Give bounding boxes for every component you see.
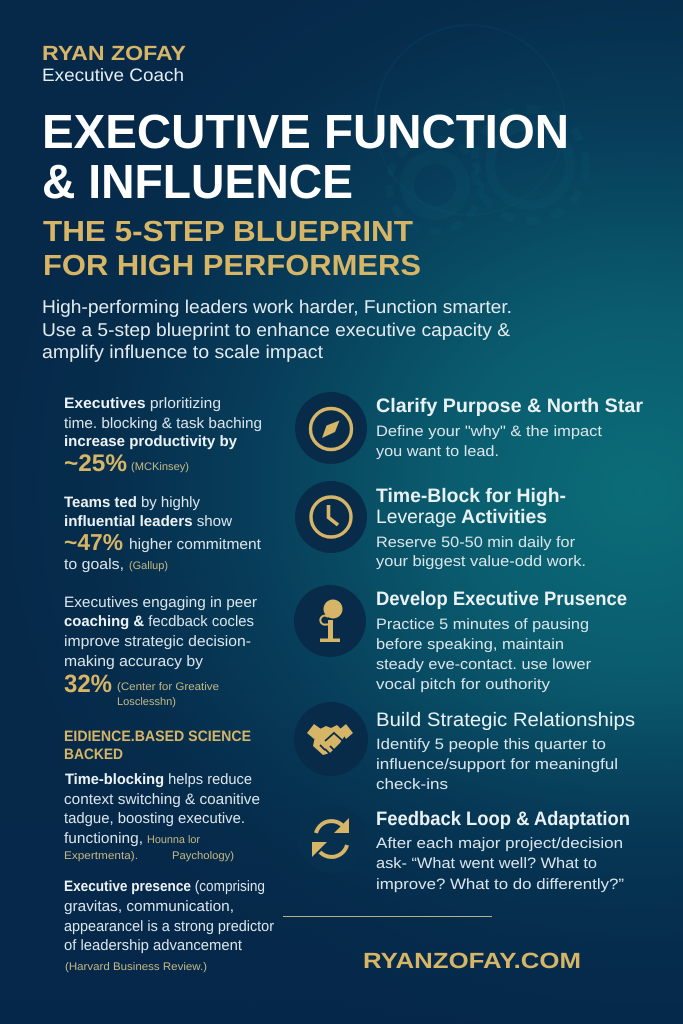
step 4 text: check-ins: [376, 776, 448, 793]
step 3 text: vocal pitch for outhority: [376, 676, 551, 693]
step 1 text: Clarify Purpose & North Star: [376, 395, 643, 417]
website footer: RYANZOFAY.COM: [363, 948, 581, 973]
subtitle: [43, 216, 421, 282]
step 2 text: Time-Block for High-: [376, 485, 566, 507]
stat: commitment: influential leaders show: [64, 513, 232, 530]
stat: decision accuracy: 32%: [64, 670, 112, 698]
step 5 text: [376, 808, 630, 893]
stat: decision accuracy: Losclesshn): [117, 696, 176, 708]
stat: commitment: Teams ted by highly: [64, 494, 200, 511]
step 3 text: [376, 588, 627, 693]
step 4 icon: handshake: [294, 702, 368, 776]
step 2 text: [376, 485, 586, 570]
stat: productivity: time. blocking & task baching: [64, 415, 262, 432]
step 5 text: ask- “What went well? What to: [376, 855, 597, 872]
evidence: time-blocking: [64, 771, 260, 862]
header: author: RYAN ZOFAY: [42, 42, 186, 65]
evidence: executive presence: of leadership advancement: [64, 937, 243, 954]
evidence heading: EIDIENCE.BASED SCIENCE: [64, 728, 251, 745]
stat: decision accuracy: (Center for Greative: [117, 681, 219, 693]
evidence: time-blocking: Expertmenta).: [64, 850, 138, 862]
evidence heading: [64, 728, 251, 763]
title: [42, 106, 569, 209]
step 5 text: After each major project/decision: [376, 835, 623, 852]
evidence: executive presence: [64, 878, 274, 973]
step 3 text: Develop Executive Prusence: [376, 588, 627, 610]
evidence: time-blocking: tadgue, boosting executive.: [64, 810, 245, 827]
step 4 text: [376, 709, 635, 793]
step 3 text: before speaking, maintain: [376, 636, 564, 653]
stat: productivity: ~25%: [64, 450, 127, 477]
step 2 text: Leverage Activities: [376, 506, 547, 528]
step 2 text: your biggest value-odd work.: [376, 553, 586, 570]
stat: productivity: Executives prloritizing: [64, 395, 221, 412]
step 4 text: influence/support for meaningful: [376, 756, 618, 773]
stat: decision accuracy: improve strategic decision-: [64, 633, 251, 650]
stat: decision accuracy: coaching & fecdback cocles: [64, 613, 254, 630]
evidence: time-blocking: Paychology): [172, 850, 234, 862]
evidence: executive presence: (Harvard Business Review.): [65, 961, 207, 973]
stat: decision accuracy: Executives engaging in peer: [64, 594, 257, 611]
step 3 icon: speaker at podium: [294, 585, 366, 657]
step 1 icon: compass: [295, 392, 367, 464]
stat: commitment: to goals,: [64, 556, 124, 573]
evidence: time-blocking: context switching & coanitive: [64, 791, 260, 808]
step 5 text: improve? What to do differently?”: [376, 876, 624, 893]
intro text: Use a 5-step blueprint to enhance executive capacity &: [42, 319, 511, 340]
intro text: High-performing leaders work harder, Function smarter.: [42, 296, 512, 317]
evidence: time-blocking: functioning,: [64, 830, 143, 847]
stat: productivity: increase productivity by: [64, 433, 238, 450]
header: author: [42, 42, 186, 85]
step 4 text: Identify 5 people this quarter to: [376, 736, 606, 753]
step 4 text: Build Strategic Relationships: [376, 709, 635, 731]
evidence: executive presence: gravitas, communication,: [64, 898, 234, 915]
step 5 text: Feedback Loop & Adaptation: [376, 808, 630, 830]
step 2 text: Reserve 50-50 min daily for: [376, 534, 575, 551]
evidence: time-blocking: Time-blocking helps reduce: [65, 771, 252, 788]
stat: commitment: higher commitment: [129, 536, 262, 553]
stat: commitment: [64, 494, 262, 573]
step 1 text: [376, 395, 643, 460]
stat: decision accuracy: [64, 594, 257, 708]
subtitle: FOR HIGH PERFORMERS: [43, 250, 421, 282]
title: EXECUTIVE FUNCTION: [42, 106, 569, 159]
step 3 text: steady eve-contact. use lower: [376, 656, 591, 673]
stat: decision accuracy: making accuracy by: [64, 653, 204, 670]
evidence heading: BACKED: [64, 746, 123, 763]
stat: commitment: (Gallup): [129, 560, 168, 572]
subtitle: THE 5-STEP BLUEPRINT: [43, 216, 413, 248]
intro text: [42, 296, 512, 362]
step 2 icon: clock: [295, 481, 367, 553]
title: & INFLUENCE: [42, 156, 353, 209]
step 5 icon: feedback loop arrows: [298, 805, 366, 873]
evidence: executive presence: appearancel is a strong predictor: [64, 918, 274, 935]
step 1 text: Define your "why" & the impact: [376, 423, 603, 440]
header: author: Executive Coach: [42, 65, 184, 85]
intro text: amplify influence to scale impact: [42, 341, 323, 362]
stat: productivity: (MCKinsey): [131, 461, 189, 473]
step 1 text: you want to lead.: [376, 443, 499, 460]
evidence: executive presence: Executive presence (comprising: [64, 878, 265, 895]
stat: commitment: ~47%: [64, 529, 123, 555]
stat: productivity: [64, 395, 262, 477]
step 3 text: Practice 5 minutes of pausing: [376, 616, 589, 633]
evidence: time-blocking: Hounna lor: [147, 834, 200, 846]
decorative gears watermark: [375, 25, 586, 231]
